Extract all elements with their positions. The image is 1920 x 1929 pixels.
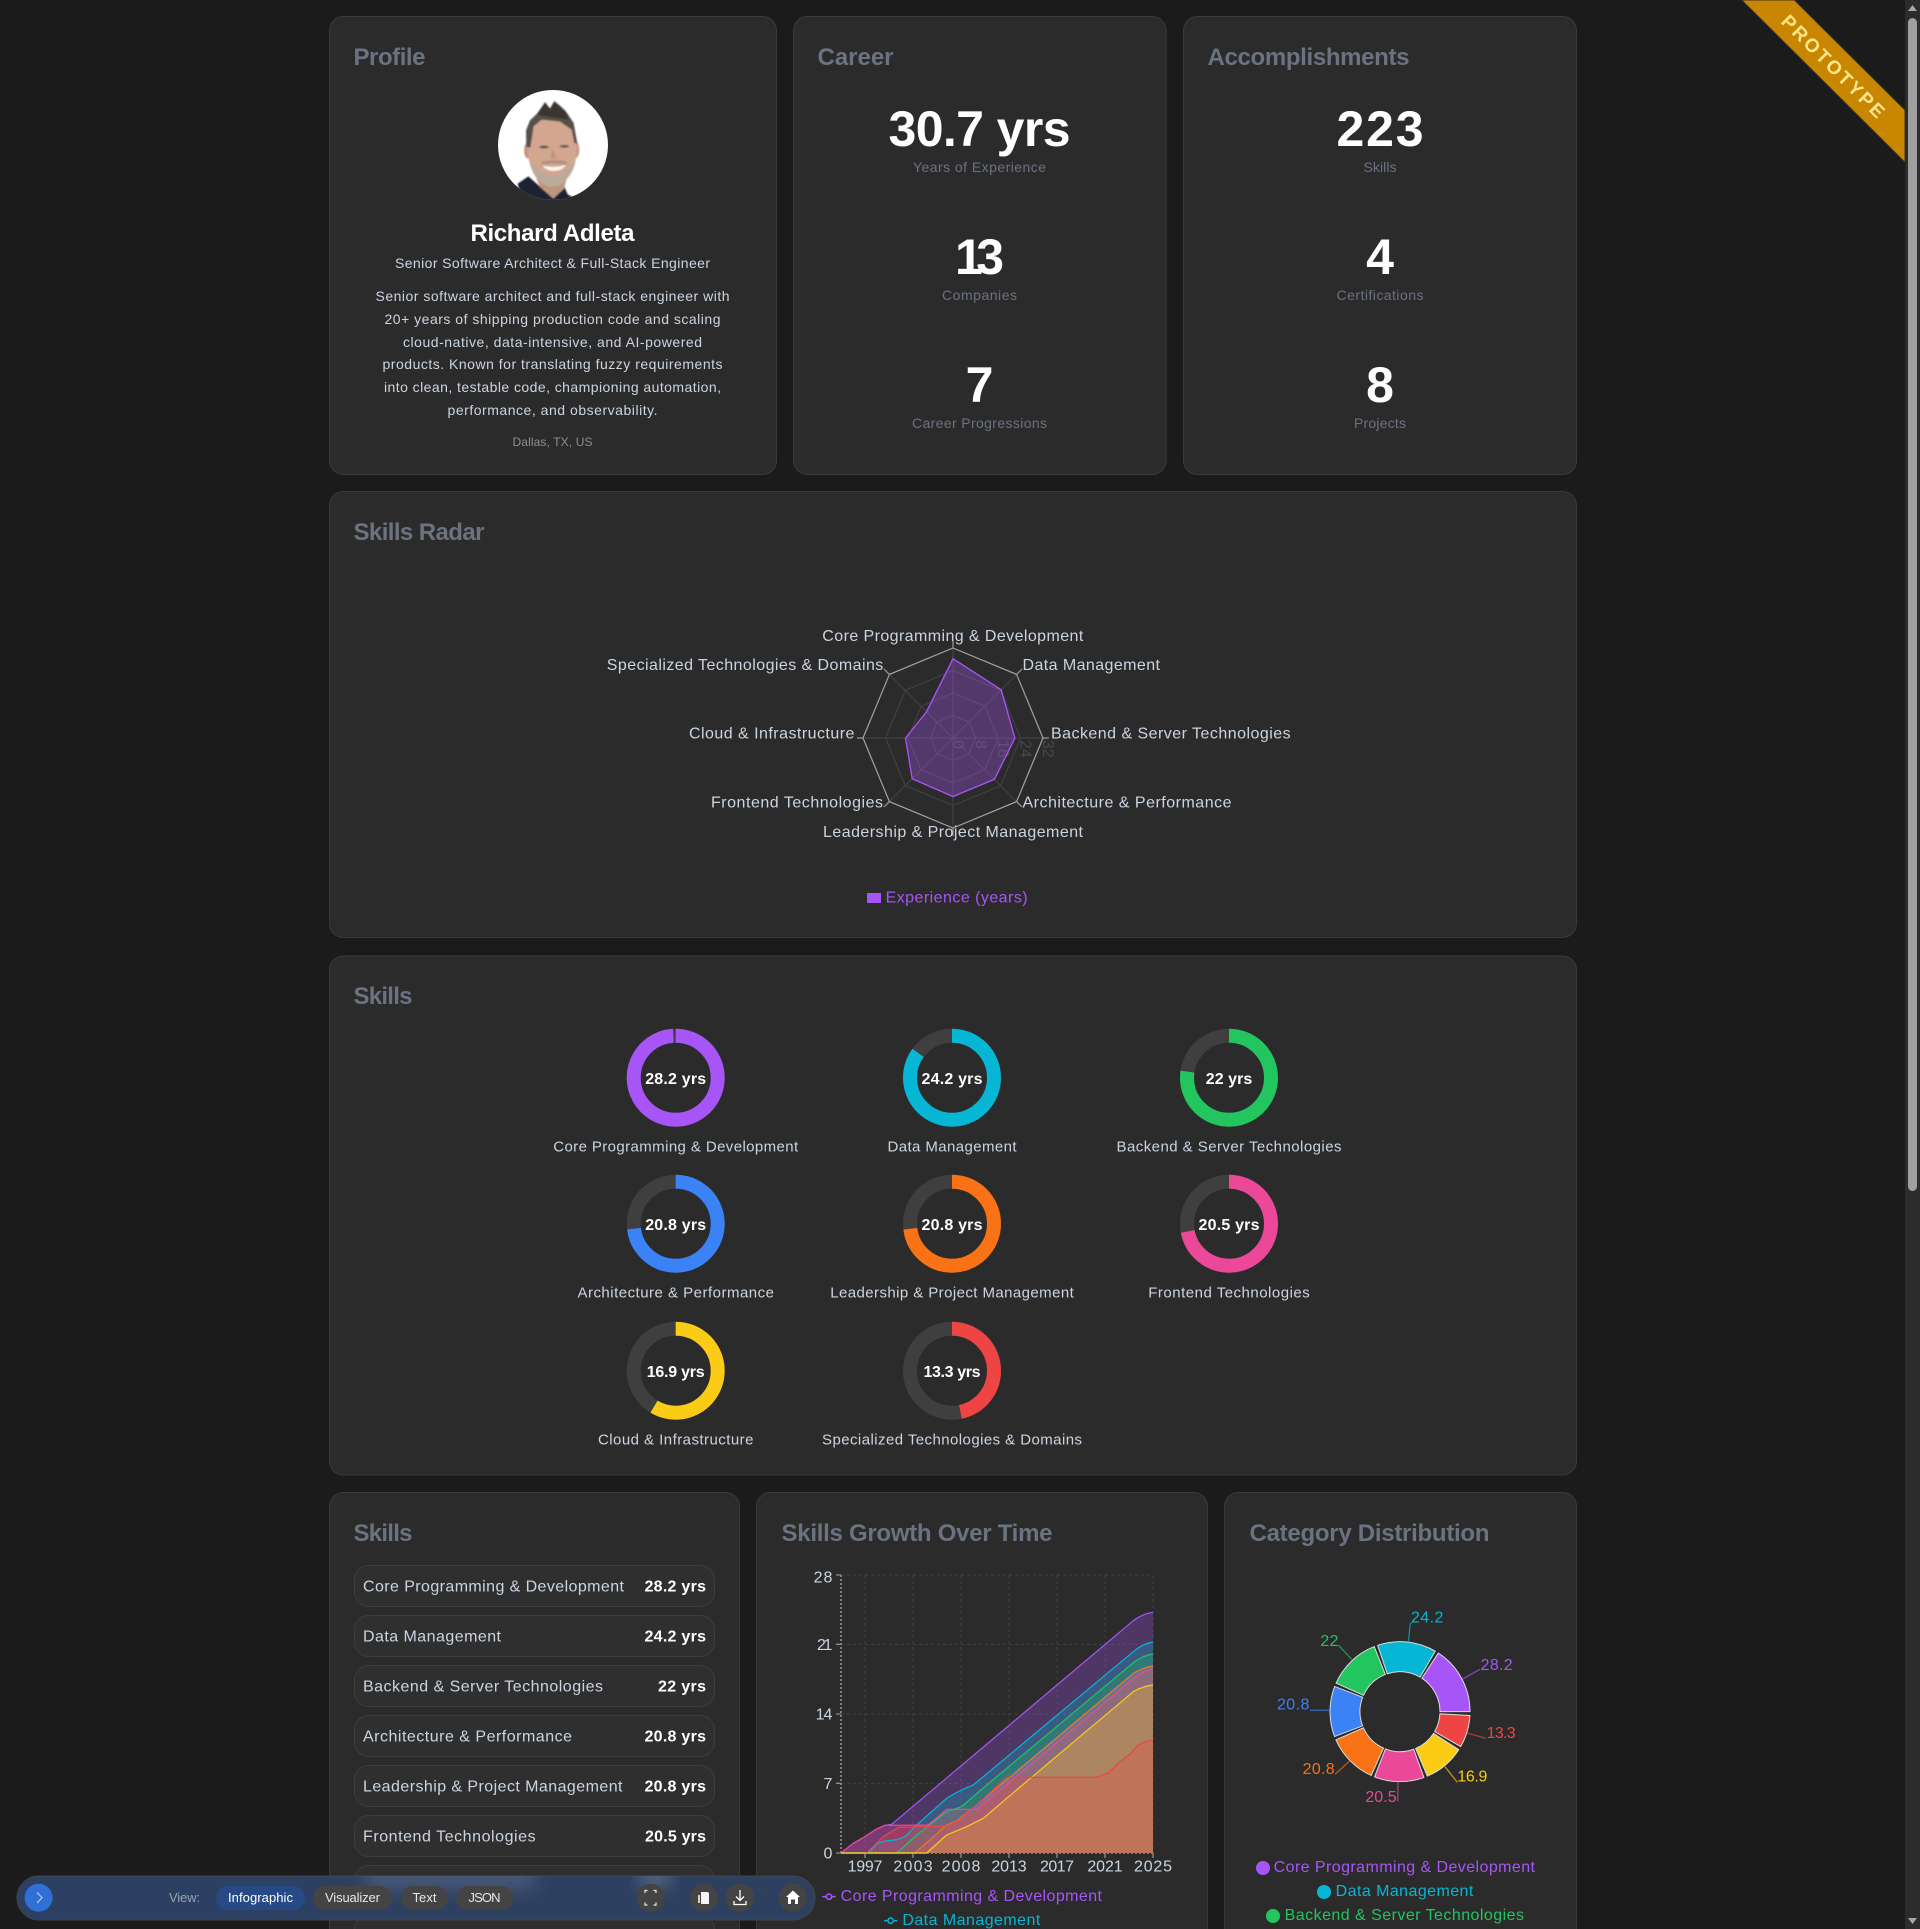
distribution legend: Backend & Server Technologies — [1285, 1907, 1524, 1924]
prototype ribbon: PROTOTYPE — [1777, 11, 1888, 123]
row: backend: 22 yrs — [658, 1678, 706, 1696]
panel: career — [794, 16, 1166, 474]
row: data management — [354, 1616, 714, 1656]
area chart: 0 — [823, 1845, 832, 1862]
area chart: 14 — [816, 1707, 832, 1724]
area chart: 2025 — [1134, 1859, 1172, 1876]
row: leadership: Leadership & Project Management — [363, 1778, 623, 1796]
row: specialized — [354, 1916, 714, 1929]
stat: certifications — [1336, 229, 1424, 303]
radar chart: 24 — [1016, 740, 1034, 758]
radar chart: Frontend Technologies — [711, 795, 883, 812]
pill: text: Text — [412, 1890, 437, 1905]
donut: specialized: Specialized Technologies & Domains — [822, 1432, 1082, 1449]
radar chart: Core Programming & Development — [822, 628, 1084, 645]
radar chart: Data Management — [1022, 657, 1161, 674]
icon: copy — [690, 1884, 718, 1912]
donut chart — [1277, 1610, 1516, 1806]
row: frontend: 20.5 yrs — [645, 1828, 706, 1846]
row: backend: Backend & Server Technologies — [363, 1678, 603, 1696]
donut: cloud: Cloud & Infrastructure — [598, 1432, 753, 1449]
row: architecture: Architecture & Performance — [363, 1728, 572, 1746]
icon: fullscreen — [637, 1884, 665, 1912]
area chart: 2003 — [893, 1859, 933, 1876]
donut chart: 13.3 — [1487, 1725, 1516, 1742]
stat: career progressions — [912, 357, 1047, 431]
stat: companies: 13 — [955, 229, 1004, 285]
biography — [376, 288, 730, 418]
radar chart — [607, 628, 1291, 841]
area chart: 7 — [823, 1776, 832, 1793]
donut: specialized — [822, 1329, 1082, 1449]
row: cloud: Cloud & Infrastructure — [363, 1878, 541, 1895]
scrollbar — [1905, 0, 1920, 1929]
area chart: 21 — [817, 1637, 832, 1654]
distribution legend: Data Management — [1336, 1883, 1474, 1900]
distribution legend: Core Programming & Development — [1274, 1859, 1536, 1876]
row: architecture — [354, 1716, 714, 1756]
toggle button — [25, 1884, 53, 1912]
donut: data management: 24.2 yrs — [922, 1071, 983, 1088]
row: cloud: 16.9 yrs — [648, 1878, 706, 1895]
icon: download — [726, 1884, 754, 1912]
area chart: 2013 — [991, 1859, 1027, 1876]
row: data management: 24.2 yrs — [644, 1628, 706, 1646]
donut chart: 20.8 — [1303, 1761, 1335, 1778]
area chart — [814, 1570, 1172, 1876]
donut chart: 20.5 — [1365, 1789, 1397, 1806]
name: Richard Adleta — [470, 220, 635, 247]
heading: career: Career — [818, 44, 894, 71]
growth legend: Core Programming & Development — [841, 1888, 1103, 1905]
pill: infographic — [216, 1886, 305, 1910]
biography: performance, and observability. — [448, 402, 658, 418]
panel: accomplishments — [1184, 16, 1576, 474]
pill: visualizer — [313, 1886, 392, 1910]
stat: career progressions: Career Progressions — [912, 415, 1047, 431]
biography: products. Known for translating fuzzy requirements — [382, 356, 722, 372]
biography: cloud-native, data-intensive, and AI-powered — [403, 334, 702, 350]
pill: infographic: Infographic — [228, 1890, 294, 1905]
area chart: 2017 — [1040, 1859, 1074, 1876]
donut: core programming: Core Programming & Development — [553, 1139, 799, 1156]
distribution legend — [1256, 1859, 1536, 1924]
donut: data management: Data Management — [888, 1139, 1017, 1156]
heading: profile: Profile — [354, 44, 426, 71]
donut: leadership: Leadership & Project Management — [830, 1285, 1075, 1302]
icon: home — [779, 1884, 807, 1912]
biography: into clean, testable code, championing automation, — [384, 379, 721, 395]
radar chart: 8 — [972, 740, 989, 749]
row: cloud — [354, 1866, 714, 1906]
biography: Senior software architect and full-stack engineer with — [376, 288, 730, 304]
area chart: 28 — [814, 1570, 832, 1587]
area chart: 1997 — [848, 1859, 882, 1876]
row: backend — [354, 1666, 714, 1706]
donut: data management — [888, 1036, 1017, 1156]
radar chart: Backend & Server Technologies — [1051, 726, 1291, 743]
radar chart: 16 — [994, 740, 1011, 758]
donut: backend — [1116, 1036, 1342, 1156]
heading: skills list: Skills — [354, 1520, 412, 1547]
panel: category distribution — [1224, 1492, 1576, 1929]
biography: 20+ years of shipping production code and scaling — [384, 311, 720, 327]
heading: skills growth: Skills Growth Over Time — [782, 1520, 1052, 1547]
pill: visualizer: Visualizer — [325, 1890, 381, 1905]
donut: backend: Backend & Server Technologies — [1116, 1139, 1342, 1156]
stat: projects: 8 — [1366, 357, 1394, 413]
stat: projects: Projects — [1354, 415, 1406, 431]
growth legend — [822, 1888, 1103, 1929]
row: architecture: 20.8 yrs — [644, 1728, 706, 1746]
prototype ribbon — [1742, 0, 1905, 162]
stat: certifications: Certifications — [1336, 287, 1424, 303]
heading: skills radar: Skills Radar — [354, 519, 484, 546]
row: core programming: Core Programming & Development — [363, 1578, 625, 1596]
stat: certifications: 4 — [1366, 229, 1394, 285]
pill: json: JSON — [468, 1890, 500, 1905]
donut: architecture: Architecture & Performance — [577, 1285, 774, 1302]
panel: skills list — [330, 1492, 740, 1929]
row: leadership: 20.8 yrs — [644, 1778, 706, 1796]
stat: skills: Skills — [1364, 159, 1396, 175]
donut: cloud — [598, 1329, 753, 1449]
heading: category distribution: Category Distribution — [1250, 1520, 1490, 1547]
donut chart: 20.8 — [1277, 1697, 1309, 1714]
donut: core programming: 28.2 yrs — [645, 1071, 706, 1088]
radar chart: Specialized Technologies & Domains — [607, 657, 883, 674]
donut: frontend — [1148, 1182, 1310, 1302]
row: core programming: 28.2 yrs — [644, 1578, 706, 1596]
radar chart: 32 — [1039, 740, 1056, 758]
donut: cloud: 16.9 yrs — [647, 1364, 705, 1381]
stat: career progressions: 7 — [966, 357, 993, 413]
donut: frontend: 20.5 yrs — [1198, 1217, 1260, 1234]
job title: Senior Software Architect & Full-Stack Engineer — [395, 255, 710, 271]
row: data management: Data Management — [363, 1628, 502, 1646]
panel: skills donuts — [330, 956, 1576, 1475]
donut: backend: 22 yrs — [1206, 1071, 1252, 1088]
radar chart: Leadership & Project Management — [823, 824, 1084, 841]
radar legend: Experience (years) — [886, 890, 1028, 907]
view label: View: — [169, 1890, 200, 1905]
donut: specialized: 13.3 yrs — [924, 1364, 981, 1381]
donut: core programming — [553, 1036, 799, 1156]
donut chart: 22 — [1320, 1633, 1338, 1650]
panel: skills radar — [330, 492, 1576, 938]
row: frontend — [354, 1816, 714, 1856]
pill: json — [456, 1886, 513, 1910]
stat: skills: 223 — [1336, 101, 1424, 157]
growth legend: Data Management — [902, 1912, 1041, 1929]
panel: profile — [330, 16, 776, 474]
donut: architecture — [577, 1182, 774, 1302]
radar chart: Architecture & Performance — [1022, 795, 1232, 812]
row: frontend: Frontend Technologies — [363, 1828, 536, 1846]
stat: years of experience: Years of Experience — [913, 159, 1046, 175]
donut: frontend: Frontend Technologies — [1148, 1285, 1310, 1302]
floating toolbar — [16, 1876, 816, 1920]
donut: leadership — [830, 1182, 1075, 1302]
donut: leadership: 20.8 yrs — [922, 1217, 983, 1234]
donut chart: 28.2 — [1481, 1657, 1513, 1674]
heading: skills: Skills — [354, 983, 412, 1010]
area chart: 2021 — [1087, 1859, 1123, 1876]
area chart: 2008 — [942, 1859, 980, 1876]
stat: companies: Companies — [942, 287, 1017, 303]
stat: companies — [942, 229, 1017, 303]
radar chart: Cloud & Infrastructure — [689, 726, 854, 743]
donut chart: 16.9 — [1457, 1769, 1487, 1786]
donut chart: 24.2 — [1411, 1610, 1443, 1627]
location: Dallas, TX, US — [512, 435, 592, 449]
avatar photo — [498, 90, 608, 207]
row: core programming — [354, 1566, 714, 1606]
stat: years of experience: 30.7 yrs — [888, 101, 1070, 157]
pill: text — [401, 1886, 448, 1910]
panel: skills growth — [756, 1492, 1208, 1929]
heading: accomplishments: Accomplishments — [1208, 44, 1410, 71]
stat: projects — [1354, 357, 1406, 431]
row: leadership — [354, 1766, 714, 1806]
donut: architecture: 20.8 yrs — [645, 1217, 706, 1234]
radar chart: 0 — [949, 740, 966, 749]
